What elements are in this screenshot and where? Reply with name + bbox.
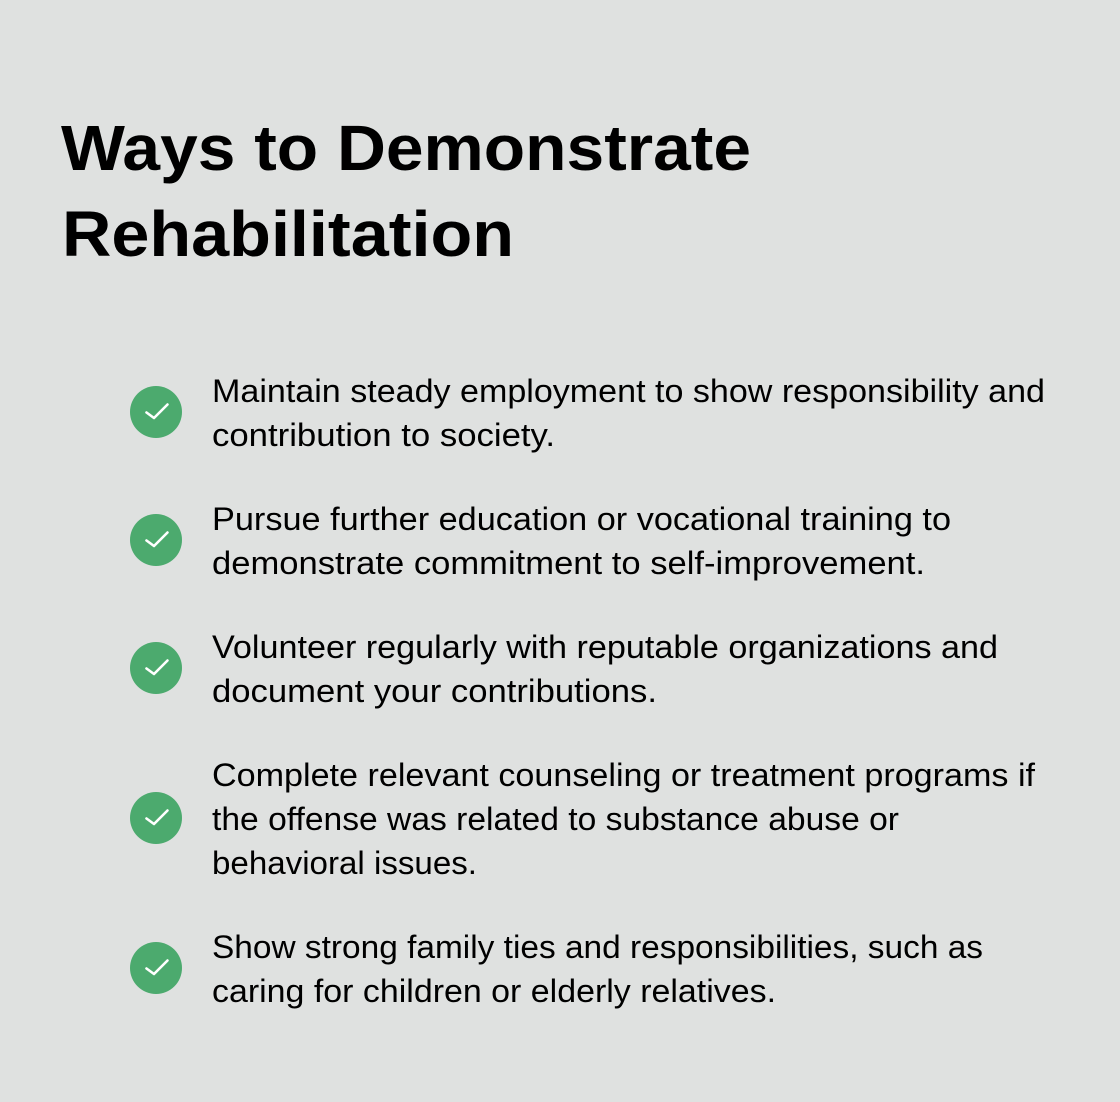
icon: check xyxy=(130,514,182,566)
text: family: Show strong family ties and responsibilities, such as xyxy=(212,929,983,965)
icon: check xyxy=(130,792,182,844)
text: family: caring for children or elderly relatives. xyxy=(212,973,776,1009)
text: employment: Maintain steady employment to show responsibility and xyxy=(212,373,1045,409)
list item: education xyxy=(130,501,951,581)
text: employment: contribution to society. xyxy=(212,417,555,453)
text: family xyxy=(212,929,983,1009)
text: volunteer: Volunteer regularly with reputable organizations and xyxy=(212,629,998,665)
list item: family xyxy=(130,929,983,1009)
text: counseling: behavioral issues. xyxy=(212,845,477,881)
text: education: demonstrate commitment to self-improvement. xyxy=(212,545,925,581)
list item: employment xyxy=(130,373,1045,453)
title xyxy=(61,112,751,270)
title: Rehabilitation xyxy=(62,198,514,270)
list item: volunteer xyxy=(130,629,998,709)
list item: counseling xyxy=(130,757,1035,881)
title: Ways to Demonstrate xyxy=(61,112,751,184)
icon: check xyxy=(130,642,182,694)
text: employment xyxy=(212,373,1045,453)
text: volunteer: document your contributions. xyxy=(212,673,657,709)
text: volunteer xyxy=(212,629,998,709)
text: counseling: the offense was related to substance abuse or xyxy=(212,801,899,837)
text: education xyxy=(212,501,951,581)
icon: check xyxy=(130,386,182,438)
text: counseling xyxy=(212,757,1035,881)
text: counseling: Complete relevant counseling or treatment programs if xyxy=(212,757,1035,793)
text: education: Pursue further education or vocational training to xyxy=(212,501,951,537)
icon: check xyxy=(130,942,182,994)
